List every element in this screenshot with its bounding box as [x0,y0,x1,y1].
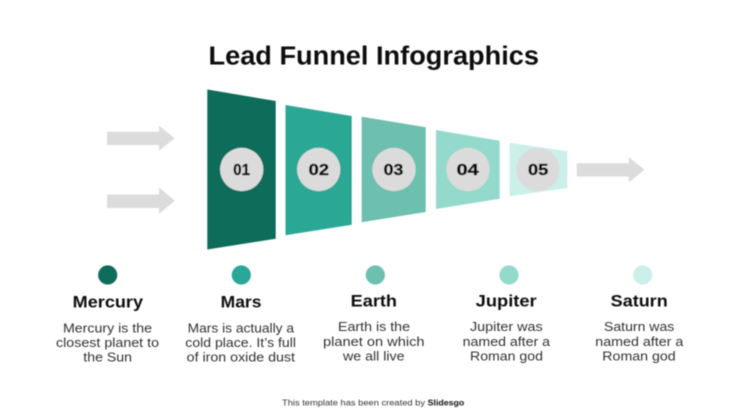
dot: Saturn [633,265,652,285]
arrow: output [577,157,644,182]
funnel segment 03 [362,117,426,222]
description: Mars: of iron oxide dust [187,350,295,365]
name: Jupiter: Jupiter [476,292,537,311]
funnel segment 04 [436,130,500,209]
description: Mars: Mars is actually a [188,320,295,336]
dot: Earth [366,265,385,285]
description: Mercury: the Sun [83,350,132,365]
description: Earth: Earth is the [338,319,410,334]
funnel segment 03: 03 [384,162,403,179]
funnel [207,90,567,250]
dot: Jupiter [499,265,519,285]
description: Jupiter: named after a [463,334,551,349]
description: Saturn: Roman god [602,349,676,364]
funnel segment 04: 04 [457,162,479,179]
column: Mars [185,265,296,365]
arrow: input top [107,126,175,151]
column: Mercury [56,265,159,365]
column: Earth [323,265,424,364]
funnel segment 05 [510,143,567,196]
funnel segment 02 [286,105,352,235]
footer credit [282,398,464,407]
arrow: input bottom [107,188,175,214]
description: Earth [323,319,424,364]
description: Mercury [56,320,159,365]
title: Lead Funnel Infographics [208,42,539,70]
footer credit: This template has been created by [282,398,425,407]
name: Mars: Mars [221,293,261,312]
footer credit: Slidesgo [428,398,464,407]
description: Saturn: named after a [595,334,684,349]
description: Earth: we all live [342,349,404,364]
name: Earth: Earth [351,292,397,311]
description: Mercury: Mercury is the [63,320,152,336]
column: Jupiter [463,265,551,364]
description: Jupiter [463,319,551,364]
dot: Mercury [98,265,117,285]
description: Saturn: Saturn was [604,319,675,334]
description: Jupiter: Jupiter was [470,319,543,334]
name: Saturn: Saturn [611,292,668,311]
dot: Mars [232,265,251,285]
funnel segment 05: 05 [528,162,548,179]
description: Mars [185,320,296,365]
funnel segment 01 [207,90,276,250]
funnel segment 01: 01 [233,162,250,179]
column: Saturn [595,265,684,364]
name: Mercury: Mercury [73,293,144,312]
description: Saturn [595,319,684,364]
description: Mars: cold place. It’s full [185,335,296,350]
funnel segment 02: 02 [309,162,329,179]
description: Mercury: closest planet to [56,335,159,350]
description: Jupiter: Roman god [470,349,543,364]
description: Earth: planet on which [323,334,424,349]
